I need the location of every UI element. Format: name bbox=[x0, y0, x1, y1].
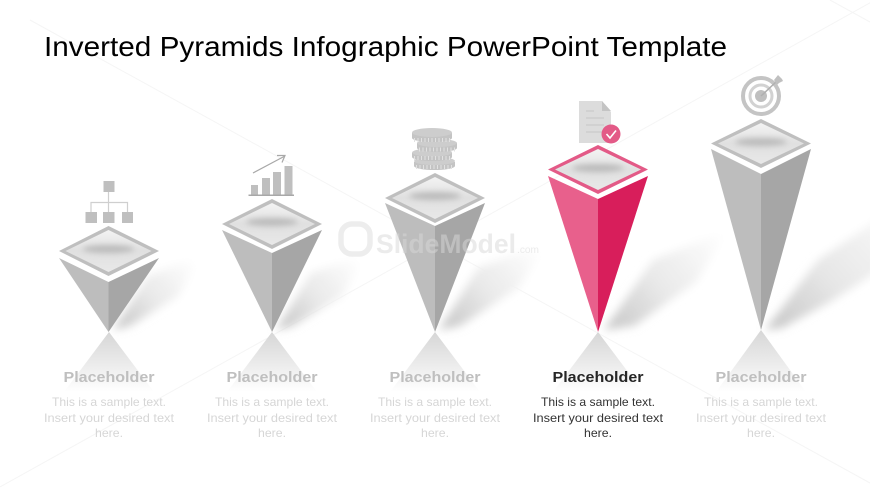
watermark: .com bbox=[517, 245, 539, 256]
reflection bbox=[390, 332, 480, 392]
top diamond inner bbox=[66, 230, 152, 272]
top shading bbox=[735, 138, 787, 146]
text block 5: Placeholder bbox=[716, 369, 807, 386]
reflection bbox=[64, 332, 154, 392]
body right face bbox=[272, 230, 322, 332]
body right face bbox=[598, 176, 648, 332]
text block 3: here. bbox=[421, 426, 449, 440]
body left face bbox=[711, 149, 761, 330]
top diamond inner bbox=[555, 149, 641, 190]
text block 4 highlighted bbox=[533, 369, 664, 440]
text block 5: here. bbox=[747, 426, 775, 440]
top diamond bbox=[222, 199, 322, 249]
pyramid 5 group bbox=[711, 75, 870, 392]
top diamond bbox=[548, 145, 648, 194]
text block 5: Insert your desired text bbox=[696, 411, 827, 425]
pyramid 2 group bbox=[222, 156, 364, 392]
top shading bbox=[246, 218, 298, 226]
body left face bbox=[548, 176, 598, 332]
body right face bbox=[761, 149, 811, 330]
top diamond bbox=[385, 173, 485, 223]
top shading bbox=[82, 245, 134, 253]
reflection bbox=[716, 330, 806, 392]
top diamond bbox=[59, 226, 159, 276]
text block 4 highlighted: Insert your desired text bbox=[533, 411, 664, 425]
cast shadow bbox=[765, 218, 870, 330]
top shading bbox=[409, 192, 461, 200]
text block 1: This is a sample text. bbox=[52, 395, 166, 409]
text block 1: here. bbox=[95, 426, 123, 440]
text block 4 highlighted: This is a sample text. bbox=[541, 395, 655, 409]
text block 2: here. bbox=[258, 426, 286, 440]
text block 2: This is a sample text. bbox=[215, 395, 329, 409]
text block 5: This is a sample text. bbox=[704, 395, 818, 409]
icon: document with check bbox=[579, 101, 620, 144]
icon: bar chart with arrow bbox=[248, 156, 294, 196]
cast shadow bbox=[439, 243, 548, 330]
text block 1 bbox=[44, 369, 175, 440]
cast shadow bbox=[604, 230, 728, 330]
pyramid 4 highlighted group bbox=[548, 101, 728, 392]
watermark: SlideModel bbox=[376, 229, 516, 259]
cast shadow bbox=[276, 256, 364, 330]
reflection bbox=[227, 332, 317, 392]
body right face bbox=[435, 203, 485, 332]
text block 4 highlighted: Placeholder bbox=[552, 369, 644, 386]
cast shadow bbox=[113, 256, 200, 330]
text block 2: Placeholder bbox=[226, 369, 318, 386]
pyramid 1 group bbox=[59, 181, 200, 392]
icon: org chart bbox=[86, 181, 133, 223]
pyramid 3 group bbox=[385, 128, 548, 392]
icon: target with arrow bbox=[743, 75, 783, 114]
body left face bbox=[385, 203, 435, 332]
top diamond inner bbox=[392, 177, 478, 219]
text block 2: Insert your desired text bbox=[207, 411, 338, 425]
watermark bbox=[341, 224, 539, 259]
body left face bbox=[222, 230, 272, 332]
reflection bbox=[553, 332, 643, 392]
text block 4 highlighted: here. bbox=[584, 426, 612, 440]
icon: stacked coins bbox=[412, 128, 457, 170]
top diamond inner bbox=[229, 203, 315, 245]
top shading bbox=[572, 164, 624, 172]
top diamond inner bbox=[718, 123, 804, 164]
title: Inverted Pyramids Infographic PowerPoint Template bbox=[44, 31, 727, 62]
text block 1: Insert your desired text bbox=[44, 411, 175, 425]
text block 5 bbox=[696, 369, 827, 440]
body left face bbox=[59, 258, 108, 332]
text block 1: Placeholder bbox=[64, 369, 155, 386]
text block 3: Insert your desired text bbox=[370, 411, 501, 425]
text block 2 bbox=[207, 369, 338, 440]
text block 3 bbox=[370, 369, 501, 440]
text block 3: Placeholder bbox=[390, 369, 481, 386]
body right face bbox=[108, 258, 159, 332]
top diamond bbox=[711, 119, 811, 168]
text block 3: This is a sample text. bbox=[378, 395, 492, 409]
